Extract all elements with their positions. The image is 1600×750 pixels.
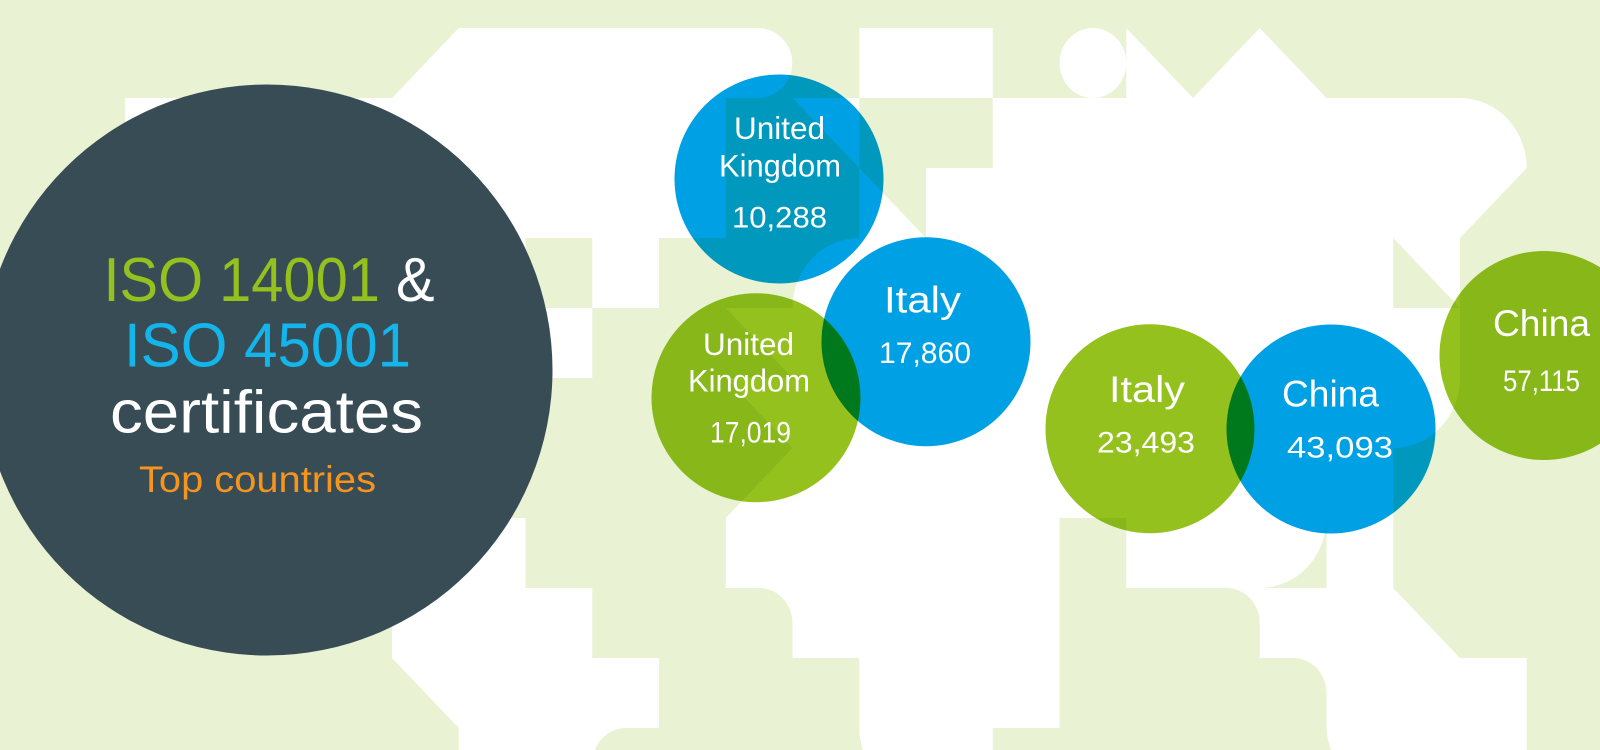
- heading: certificates: certificates: [110, 378, 423, 445]
- bubble: United Kingdom ISO 14001: Kingdom: [688, 363, 810, 399]
- subheading: top countries: Top countries: [139, 459, 376, 500]
- bubble: Italy ISO 45001: [822, 237, 1030, 446]
- bubble: Italy ISO 14001: Italy: [1109, 369, 1186, 410]
- bubble: Italy ISO 45001: 17,860: [879, 337, 971, 370]
- bubble: China ISO 45001: [1226, 324, 1436, 534]
- bubble: China ISO 45001: 43,093: [1287, 432, 1393, 465]
- bubble: Italy ISO 45001: Italy: [884, 280, 962, 321]
- bubble: United Kingdom ISO 45001: United: [734, 110, 825, 146]
- bubble: Italy ISO 14001: 23,493: [1097, 427, 1195, 460]
- bubble: China ISO 14001: China: [1493, 303, 1590, 344]
- heading: ISO 45001: ISO 45001: [124, 312, 411, 381]
- bubble: United Kingdom ISO 45001: 10,288: [732, 202, 827, 235]
- bubble: China ISO 14001: 57,115: [1503, 365, 1580, 398]
- bubble: United Kingdom ISO 45001: Kingdom: [719, 148, 841, 184]
- bubble: United Kingdom ISO 45001: [674, 74, 884, 284]
- heading: ISO 14001 &: ISO 14001 &: [104, 246, 434, 315]
- bubble: United Kingdom ISO 14001: United: [703, 326, 794, 362]
- panel: title circle: [0, 84, 552, 656]
- bubble: China ISO 45001: China: [1282, 374, 1379, 415]
- bubble: Italy ISO 14001: [1046, 324, 1254, 533]
- bubble: China ISO 14001: [1440, 251, 1600, 460]
- bubble: United Kingdom ISO 14001: 17,019: [710, 417, 791, 450]
- bubble: United Kingdom ISO 14001: [652, 293, 860, 502]
